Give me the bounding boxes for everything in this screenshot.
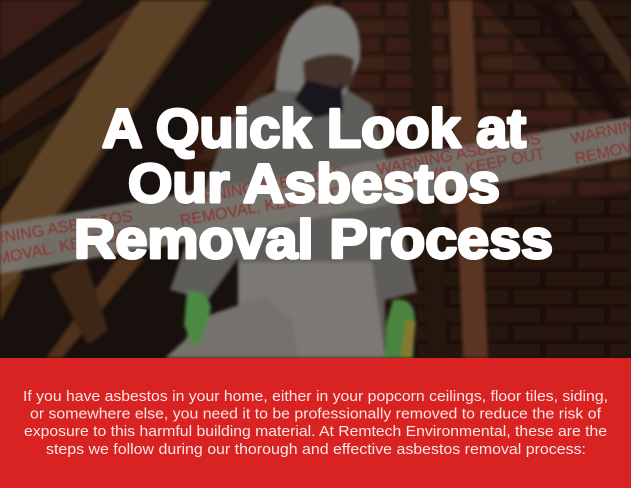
title: Our Asbestos xyxy=(128,152,500,214)
tape lettering: WARNING ASBESTOS xyxy=(178,164,344,210)
brick wall xyxy=(180,0,631,358)
warning tape xyxy=(0,117,631,274)
intro paragraph: steps we follow during our thorough and effective asbestos removal process: xyxy=(46,442,586,458)
tape lettering: REMOVAL. KEEP OUT xyxy=(380,145,546,194)
worker in protective suit xyxy=(165,5,417,358)
intro paragraph xyxy=(23,389,608,458)
intro paragraph: exposure to this harmful building material. At Remtech Environmental, these are the xyxy=(24,424,607,440)
tape lettering: REMOVAL. KEEP OUT xyxy=(179,184,346,230)
title: A Quick Look at xyxy=(102,97,526,159)
title xyxy=(74,97,553,270)
intro paragraph: If you have asbestos in your home, either in your popcorn ceilings, floor tiles, siding, xyxy=(23,389,608,405)
intro paragraph: or somewhere else, you need it to be professionally removed to reduce the risk of xyxy=(30,406,602,422)
title: Removal Process xyxy=(74,208,553,270)
tape lettering xyxy=(0,115,631,268)
red intro panel xyxy=(0,358,631,488)
tape lettering: WARNING ASBESTOS xyxy=(376,131,542,179)
attic background xyxy=(0,0,631,358)
rafters xyxy=(0,0,631,358)
hero photo: asbestos worker in attic xyxy=(0,0,631,358)
